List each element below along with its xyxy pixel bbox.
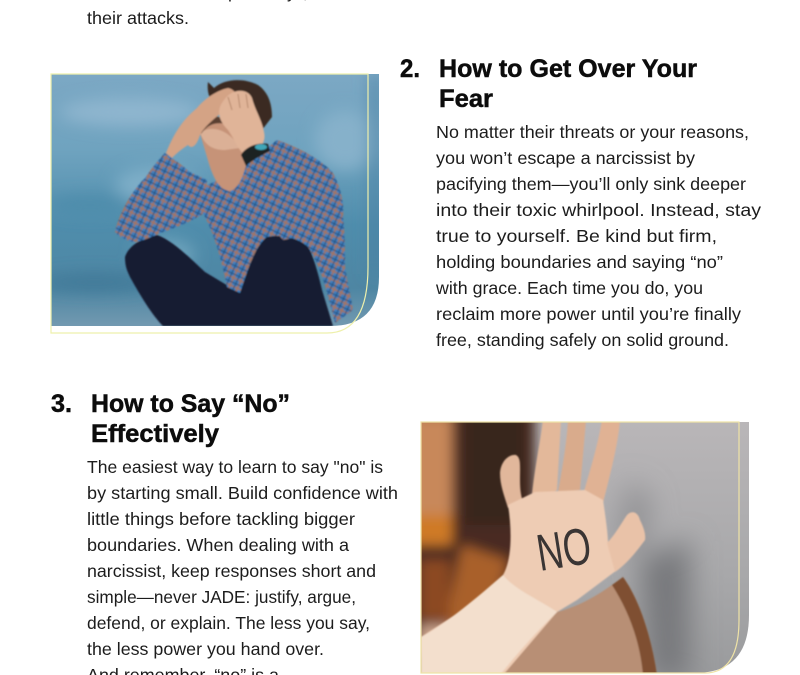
watch — [241, 144, 270, 166]
shoulder — [504, 584, 644, 672]
heading: section 3 — [51, 390, 290, 448]
body text: section 3: narcissist, keep responses short and — [87, 561, 376, 581]
right thumb — [607, 512, 645, 572]
photo: hand with NO written on palm — [410, 410, 749, 675]
body text: section 2: true to yourself. Be kind but firm, — [436, 226, 717, 246]
left hand and arm — [166, 88, 236, 158]
heading: section 2: Fear — [439, 85, 493, 113]
fingers — [531, 422, 562, 494]
body text: section 3: simple—never JADE: justify, argue, — [87, 587, 356, 607]
hair — [410, 410, 535, 675]
NO on palm: NO — [533, 517, 595, 583]
body text: section 2: reclaim more power until you’re finally — [436, 304, 741, 324]
intro text tail: their attacks. — [87, 8, 189, 28]
body text: section 3: by starting small. Build confidence with — [87, 483, 398, 503]
body text: section 3: defend, or explain. The less you say, — [87, 613, 370, 633]
right hand and arm — [219, 91, 265, 155]
body text: section 2: free, standing safely on solid ground. — [436, 330, 729, 350]
hair — [208, 80, 272, 130]
right arm sleeve — [280, 236, 292, 241]
heading: section 3: How to Say “No” — [91, 390, 290, 418]
arm highlight — [421, 575, 557, 675]
body text: section 2: holding boundaries and saying “no” — [436, 252, 723, 272]
heading: section 2: How to Get Over Your — [439, 55, 697, 83]
body text: section 2: pacifying them—you’ll only sink deeper — [436, 174, 746, 194]
intro text tail — [87, 0, 308, 28]
shirt body — [203, 140, 353, 323]
neck and face — [199, 122, 248, 191]
thumb side finger — [500, 455, 524, 508]
photo: stressed man by the sea — [40, 74, 383, 333]
heading: section 2 — [400, 55, 697, 113]
left forearm sleeve — [115, 153, 207, 242]
body text: section 3: The easiest way to learn to say "no" is — [87, 457, 383, 477]
body text: section 3: boundaries. When dealing with a — [87, 535, 349, 555]
heading: section 3: Effectively — [91, 420, 219, 448]
body text: section 3: little things before tackling bigger — [87, 509, 355, 529]
body text: section 3: the less power you hand over. — [87, 639, 324, 659]
body text: section 2 — [435, 122, 761, 350]
body text: section 2: with grace. Each time you do, you — [435, 278, 703, 298]
wall shading — [620, 480, 690, 675]
body text: section 2: No matter their threats or your reasons, — [436, 122, 749, 142]
palm, wrist and arm — [421, 490, 617, 675]
trousers — [125, 235, 333, 326]
body text: section 2: into their toxic whirlpool. Instead, stay — [436, 200, 761, 220]
body text: section 3 — [87, 457, 398, 675]
heading: section 3: 3. — [51, 390, 72, 418]
heading: section 2: 2. — [400, 55, 420, 83]
body text: section 2: you won’t escape a narcissist by — [436, 148, 695, 168]
